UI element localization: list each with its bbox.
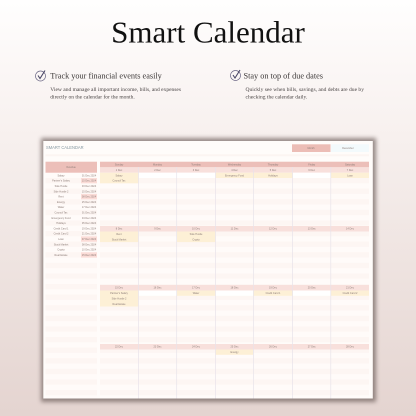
feature: track financial events: directly on the calendar for the month. xyxy=(50,94,135,101)
overdue list panel: 25 Dec 2024 xyxy=(82,201,97,204)
feature: track financial events: Track your financial events easily xyxy=(50,72,163,80)
overdue list panel: Emergency Fund xyxy=(51,217,71,220)
feature: stay on top of due dates: Quickly see when bills, savings, and debts are due by xyxy=(246,87,364,93)
week 2: Side Hustle xyxy=(190,233,203,236)
overdue list panel: 21 Dec 2024 xyxy=(82,233,97,236)
feature: stay on top of due dates: checking the calendar daily. xyxy=(246,95,308,101)
feature: stay on top of due dates xyxy=(230,70,364,101)
overdue list panel: 19 Dec 2024 xyxy=(82,227,97,230)
overdue list panel: 08 Dec 2024 xyxy=(82,243,97,246)
week 1: 1 Dec xyxy=(116,169,123,172)
overdue list panel xyxy=(46,162,97,398)
week 4: 24 Dec xyxy=(192,346,201,349)
overdue list panel: Council Tax xyxy=(55,212,68,214)
week 1: 3 Dec xyxy=(193,169,200,172)
week 1: Salary xyxy=(115,174,123,177)
week 1: Emergency Fund xyxy=(225,174,245,177)
month selector: Month xyxy=(308,147,315,150)
overdue list panel: Water xyxy=(58,206,64,209)
overdue list panel: Overdue xyxy=(66,166,76,169)
week 3: 21 Dec xyxy=(346,287,355,290)
week 1: Loan xyxy=(347,174,353,177)
overdue list panel: Energy xyxy=(57,201,66,204)
week 1: 5 Dec xyxy=(270,169,277,172)
overdue list panel: 15 Dec 2024 xyxy=(82,254,97,257)
overdue list panel: Partner's Salary xyxy=(52,180,71,183)
overdue list panel: 04 Dec 2024 xyxy=(82,217,97,220)
week 3: 15 Dec xyxy=(115,287,124,290)
overdue list panel: 15 Dec 2024 xyxy=(82,190,97,193)
week 4: 23 Dec xyxy=(154,346,162,349)
week 3: 17 Dec xyxy=(192,287,201,290)
overdue list panel: Credit Card 2 xyxy=(54,233,69,236)
week 4: 25 Dec xyxy=(231,346,239,349)
week 1 xyxy=(100,167,369,183)
spreadsheet panel xyxy=(43,141,373,398)
overdue list panel: 07 Dec 2024 xyxy=(82,238,97,241)
week 3: Real Estate xyxy=(113,303,126,306)
weekday header xyxy=(100,162,369,167)
week 3: 19 Dec xyxy=(269,287,278,290)
overdue list panel: Holidays xyxy=(56,222,67,225)
week 3: Side Hustle 2 xyxy=(112,298,127,300)
week 3: Credit Card 2 xyxy=(343,292,358,295)
week 4: 28 Dec xyxy=(346,346,355,349)
overdue list panel: 17 Dec 2024 xyxy=(82,206,97,209)
week 4: Energy xyxy=(231,351,239,354)
overdue list panel: 08 Dec 2024 xyxy=(82,196,97,199)
month selector xyxy=(292,144,369,152)
week 2: 9 Dec xyxy=(154,228,162,231)
weekday header: Tuesday xyxy=(191,164,201,166)
week 2: 10 Dec xyxy=(192,228,201,231)
week 1: 2 Dec xyxy=(154,169,162,172)
week 3: 20 Dec xyxy=(308,287,316,290)
overdue list panel: 10 Dec 2024 xyxy=(82,249,97,252)
weekday header: Saturday xyxy=(345,164,356,166)
overdue list panel: 01 Dec 2024 xyxy=(82,212,97,214)
week 1: 4 Dec xyxy=(231,169,239,172)
overdue list panel: 15 Dec 2024 xyxy=(82,180,97,183)
week 3: Partner's Salary xyxy=(110,292,129,295)
overdue list panel: Side Hustle 2 xyxy=(54,190,69,193)
overdue list panel: Credit Card 1 xyxy=(54,227,69,230)
week 2: 14 Dec xyxy=(346,228,355,231)
sheet heading: SMART CALENDAR xyxy=(46,145,84,150)
overdue list panel: 01 Dec 2024 xyxy=(82,174,97,177)
overdue list panel: Crypto xyxy=(57,249,65,252)
overdue list panel: Salary xyxy=(57,174,65,177)
week 1: Council Tax xyxy=(113,180,126,183)
weekday header: Monday xyxy=(153,164,163,166)
overdue list panel: Stock Market xyxy=(54,243,69,246)
week 2: 8 Dec xyxy=(116,228,123,231)
week 3 xyxy=(100,285,369,306)
week 3: 18 Dec xyxy=(231,287,239,290)
week 2: Crypto xyxy=(192,238,200,242)
overdue list panel: Loan xyxy=(58,238,64,241)
week 2 xyxy=(100,226,369,242)
week 1: 7 Dec xyxy=(347,169,354,172)
feature: stay on top of due dates: Stay on top of due dates xyxy=(244,72,323,80)
week 3: Water xyxy=(193,292,199,295)
weekday header: Sunday xyxy=(115,164,124,166)
week 2: Rent xyxy=(116,233,122,236)
month selector: December xyxy=(342,147,354,150)
week 3: 16 Dec xyxy=(154,287,162,290)
weekday header: Wednesday xyxy=(228,164,242,166)
icon: check badge right xyxy=(230,70,240,80)
calendar grid xyxy=(100,162,369,398)
icon: check badge left xyxy=(36,70,46,81)
week 1: Holidays xyxy=(268,174,279,177)
overdue list panel: 05 Dec 2024 xyxy=(82,222,97,225)
feature: track financial events: View and manage all important income, bills, and expenses xyxy=(50,87,181,93)
feature: track financial events xyxy=(36,70,181,101)
week 4: 27 Dec xyxy=(308,346,316,349)
week 2: 12 Dec xyxy=(269,228,278,231)
week 3: Credit Card 1 xyxy=(266,292,281,295)
week 2: Stock Market xyxy=(112,238,127,242)
weekday header: Thursday xyxy=(268,164,279,166)
overdue list panel: Real Estate xyxy=(55,254,68,257)
week 1: 6 Dec xyxy=(308,169,316,172)
week 4: 22 Dec xyxy=(115,346,124,349)
overdue list panel: Side Hustle xyxy=(55,185,68,188)
week 2: 11 Dec xyxy=(231,228,239,231)
week 4 xyxy=(100,344,369,355)
week 4: 26 Dec xyxy=(269,346,278,349)
week 2: 13 Dec xyxy=(308,228,316,231)
overdue list panel: Rent xyxy=(58,196,64,199)
title: Smart Calendar xyxy=(111,14,306,50)
weekday header: Friday xyxy=(308,164,316,166)
overdue list panel: 03 Dec 2024 xyxy=(82,185,97,188)
